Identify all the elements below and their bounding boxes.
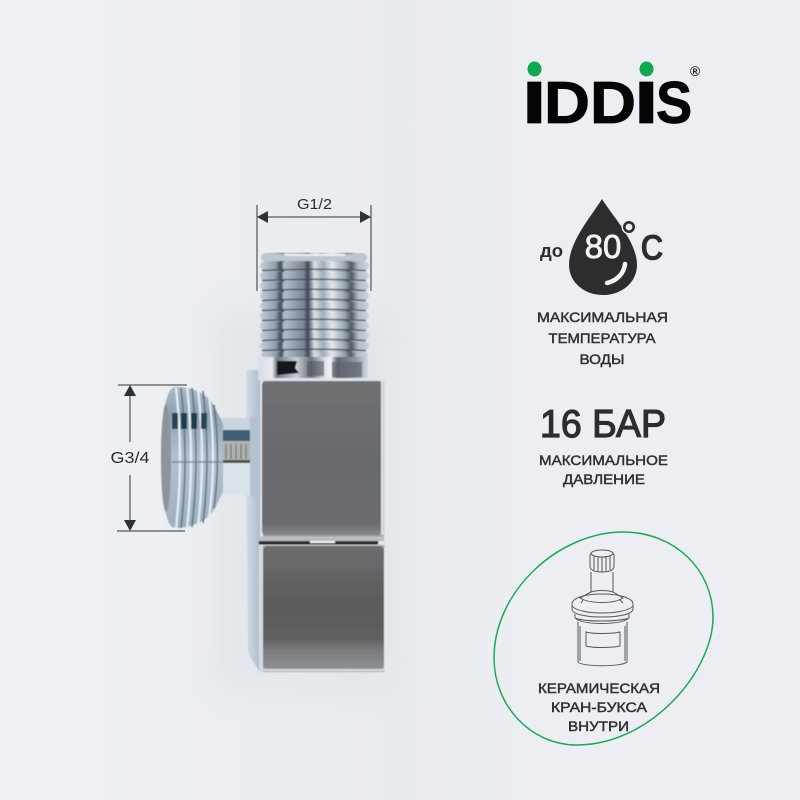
logo: IDDIS: D: [544, 70, 590, 136]
logo: IDDIS: I: [634, 70, 659, 136]
collar: [258, 357, 368, 380]
text: max water temperature: ТЕМПЕРАТУРА: [548, 330, 656, 346]
icon: water drop with 80 °C: 80: [585, 228, 621, 265]
logo green dots: [528, 62, 542, 76]
text: ceramic cartridge inside: ВНУТРИ: [568, 718, 629, 734]
dimension: G1/2: G1/2: [297, 196, 332, 213]
icon: water drop with 80 °C: С: [640, 227, 664, 268]
logo: IDDIS: I: [522, 70, 547, 136]
heading: 16 bar: 16 БАР: [540, 403, 666, 446]
product: angle valve: [161, 253, 395, 690]
text: max water temperature: МАКСИМАЛЬНАЯ: [537, 309, 668, 325]
side thread fitting: [161, 387, 223, 528]
dimension: G1/2: [257, 196, 371, 291]
valve shadow: [215, 310, 395, 690]
icon: water drop with 80 °C: до: [540, 241, 563, 261]
text: max pressure: МАКСИМАЛЬНОЕ: [539, 452, 668, 468]
text: ceramic cartridge inside: КРАН-БУКСА: [551, 699, 648, 715]
dimension: G3/4: G3/4: [110, 450, 150, 467]
top thread: [258, 253, 369, 380]
text: ceramic cartridge inside: [538, 680, 660, 734]
handle face: [259, 545, 386, 672]
text: max pressure: [539, 452, 668, 487]
text: max pressure: ДАВЛЕНИЕ: [563, 471, 645, 487]
text: max water temperature: ВОДЫ: [580, 351, 624, 367]
upper body face: [260, 378, 384, 537]
logo: IDDIS: S: [656, 71, 692, 137]
callout: ceramic cartridge: [494, 532, 713, 745]
registered mark: ®: [690, 63, 701, 79]
dimension: G3/4: [110, 385, 187, 531]
text: ceramic cartridge inside: КЕРАМИЧЕСКАЯ: [538, 680, 660, 696]
left side strip of body: [246, 370, 262, 671]
gap between body and handle: [259, 537, 384, 544]
icon: cartridge: [572, 550, 633, 666]
green outline: [494, 532, 713, 745]
icon: water drop with 80 °C: [540, 199, 664, 295]
logo: IDDIS: D: [590, 70, 636, 136]
icon: drop: [569, 199, 637, 295]
logo: IDDIS: [522, 62, 701, 137]
side stem: [216, 416, 260, 497]
text: max water temperature: [537, 309, 668, 367]
